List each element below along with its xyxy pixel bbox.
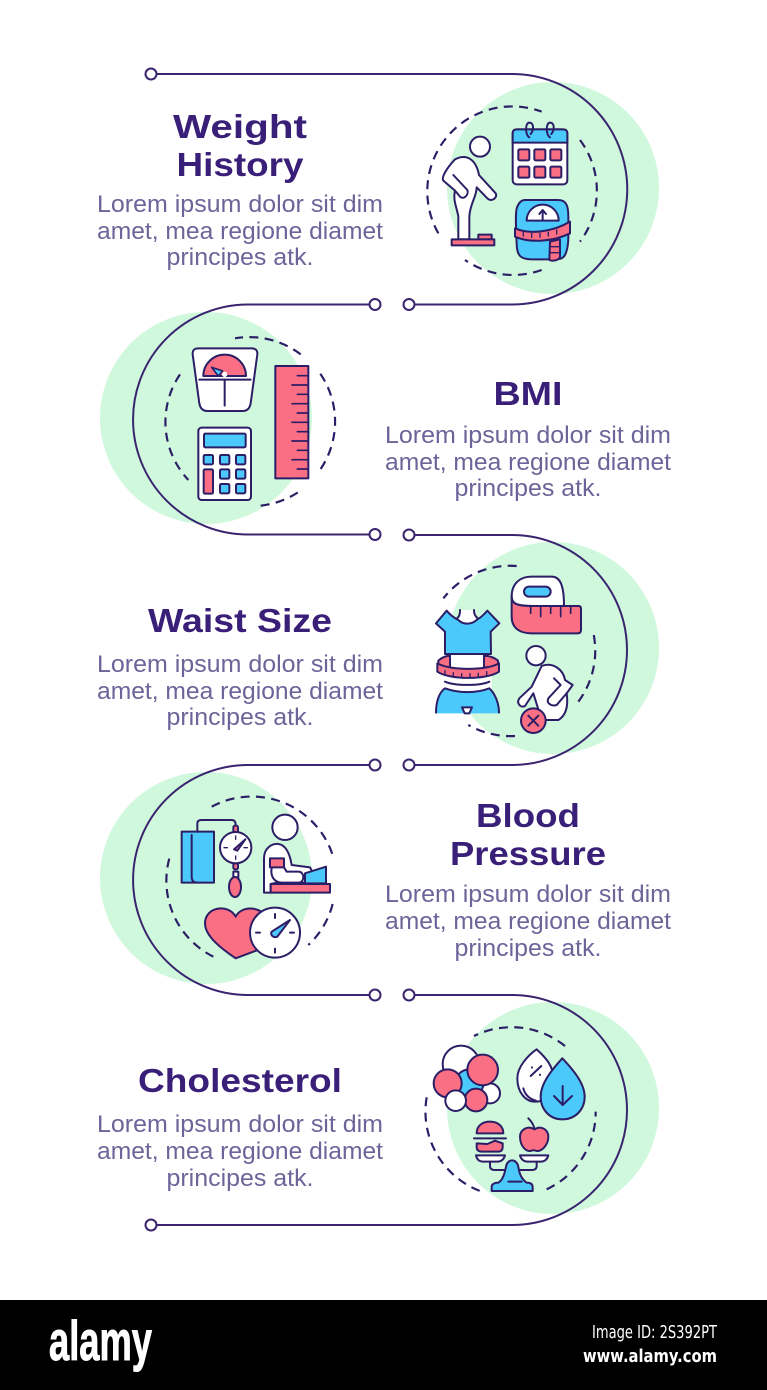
body text: Lorem ipsum dolor sit dim (385, 422, 671, 449)
bottom node (370, 990, 380, 1000)
icon: calculator (198, 428, 251, 500)
heading: blood pressure (450, 797, 606, 872)
green circle backdrop (447, 542, 659, 754)
dashed ring (166, 797, 333, 957)
body text: amet, mea regione diamet (97, 678, 383, 705)
icon: scale with tape (515, 200, 570, 261)
body text: Lorem ipsum dolor sit dim (385, 881, 671, 908)
body text: principes atk. (166, 1165, 314, 1192)
heading: weight history: History (176, 146, 304, 183)
footer bar (0, 1300, 767, 1390)
body text (97, 651, 383, 731)
heading: blood pressure: Pressure (450, 835, 606, 872)
heading: weight history (173, 108, 307, 183)
top node (370, 299, 380, 310)
green circle backdrop (100, 312, 312, 524)
end node (146, 1220, 156, 1230)
body text: amet, mea regione diamet (97, 1138, 383, 1165)
connector line (151, 74, 627, 304)
connector line (133, 304, 375, 534)
icon group: sphygmomanometer, patient, heart (166, 797, 333, 958)
image id: Image ID: 2S392PT (592, 1322, 718, 1343)
body text (97, 1111, 383, 1192)
top node (370, 760, 380, 770)
icon: cholesterol molecules (434, 1046, 500, 1111)
connector line (409, 535, 627, 765)
panel: cholesterol (97, 990, 659, 1230)
end node (404, 299, 414, 310)
icon: torso with belt (436, 610, 499, 713)
body text: Lorem ipsum dolor sit dim (97, 191, 383, 218)
body text: principes atk. (454, 475, 602, 502)
panel: blood pressure (100, 760, 671, 1000)
bottom node (370, 529, 380, 540)
icon group: scale, ruler, calculator (165, 337, 335, 506)
body text: Lorem ipsum dolor sit dim (97, 1111, 383, 1138)
heading: cholesterol: Cholesterol (138, 1062, 342, 1099)
icon group: person, calendar, scale (427, 106, 597, 275)
green circle backdrop (447, 1002, 659, 1214)
icon group: torso, tape, person (436, 566, 595, 736)
body text: principes atk. (166, 244, 314, 271)
heading: waist size: Waist Size (148, 602, 332, 639)
icon: heart with gauge (205, 908, 300, 958)
icon: calendar (513, 123, 567, 184)
start node (146, 68, 156, 80)
icon group: molecules, drops, food balance (425, 1027, 596, 1191)
body text (97, 191, 383, 271)
dashed ring (443, 566, 595, 736)
body text: amet, mea regione diamet (385, 449, 671, 476)
body text (385, 422, 671, 502)
icon: weighing scale (193, 348, 257, 411)
top node (404, 530, 414, 540)
body text: amet, mea regione diamet (97, 218, 383, 245)
heading: weight history: Weight (173, 108, 307, 145)
website: www.alamy.com (583, 1346, 717, 1367)
panel: waist size (97, 530, 659, 770)
body text: principes atk. (166, 704, 314, 731)
dashed ring (425, 1027, 596, 1191)
connector line (151, 995, 627, 1225)
icon: person with crossed circle (518, 646, 573, 733)
icon: fat drops (517, 1049, 585, 1119)
panel: BMI (100, 299, 671, 540)
body text (385, 881, 671, 962)
icon: tape measure (512, 577, 581, 633)
icon: seated patient (264, 815, 330, 893)
heading: blood pressure: Blood (476, 797, 580, 834)
body text: principes atk. (454, 935, 602, 962)
heading: BMI: BMI (494, 375, 562, 412)
body text: Lorem ipsum dolor sit dim (97, 651, 383, 678)
icon: blood pressure cuff (182, 820, 251, 897)
body text: amet, mea regione diamet (385, 908, 671, 935)
panel: weight history (97, 68, 659, 310)
green circle backdrop (100, 772, 312, 984)
icon: person on scale (443, 137, 496, 245)
icon: ruler (275, 366, 308, 478)
logo wordmark: alamy (49, 1309, 152, 1372)
dashed ring (427, 106, 597, 275)
connector line (133, 765, 375, 995)
top node (404, 990, 414, 1000)
dashed ring (165, 337, 335, 506)
icon: burger and apple on balance (474, 1118, 548, 1191)
bottom node (404, 760, 414, 770)
green circle backdrop (447, 82, 659, 294)
